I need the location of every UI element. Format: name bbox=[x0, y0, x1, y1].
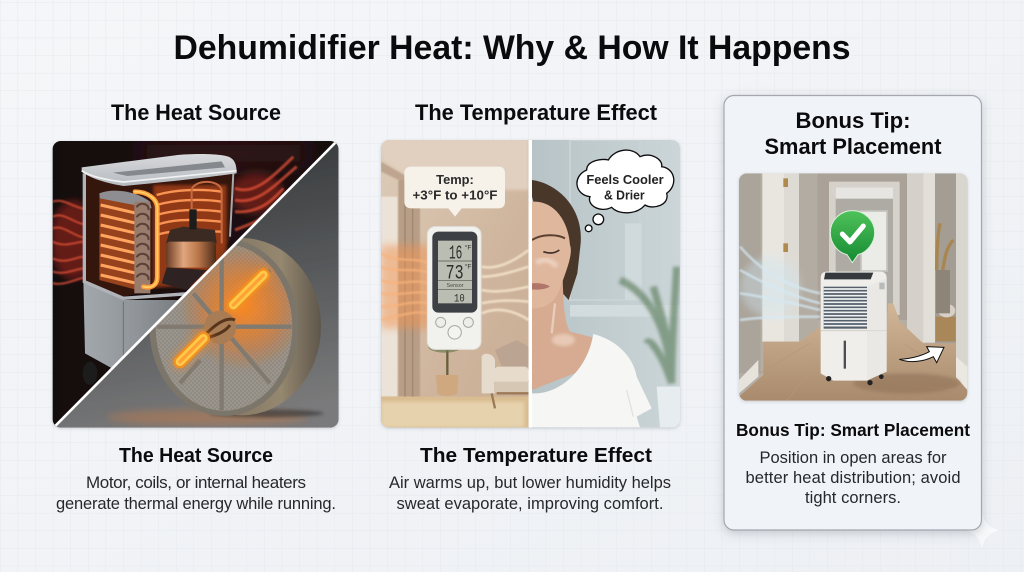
white shirt bbox=[532, 334, 652, 427]
heading: the heat source: The Heat Source bbox=[111, 100, 281, 125]
dehumidifier bbox=[821, 272, 887, 385]
caption heading: bonus tip: Bonus Tip: Smart Placement bbox=[736, 420, 970, 440]
caption text: the heat source bbox=[56, 473, 336, 513]
floor bbox=[739, 303, 967, 401]
panel: the temperature effect bbox=[377, 100, 682, 513]
basket and decor bbox=[936, 317, 956, 341]
left: warm room bbox=[377, 137, 530, 430]
heading: the temperature effect: The Temperature Effect bbox=[415, 100, 658, 125]
plant bbox=[620, 267, 677, 383]
interior bbox=[84, 173, 233, 297]
caption heading: the heat source: The Heat Source bbox=[119, 445, 273, 467]
caption text: bonus tip: tight corners. bbox=[805, 489, 901, 507]
icon: green check pin bbox=[830, 211, 875, 263]
motor bbox=[166, 227, 217, 243]
title: Dehumidifier Heat: Why & How It Happens bbox=[174, 29, 850, 67]
frame and lid bbox=[84, 173, 193, 298]
neck and body skin bbox=[532, 280, 593, 390]
thermostat device: 73 bbox=[446, 263, 464, 286]
plant and pot bbox=[446, 350, 448, 375]
caption text: bonus tip: better heat distribution; avoid bbox=[746, 469, 960, 487]
heading: bonus tip bbox=[764, 108, 942, 159]
icon: sparkle bbox=[964, 512, 1000, 548]
upper-left: dehumidifier cutaway bbox=[50, 138, 307, 385]
illustration: thermostat and woman bbox=[377, 137, 682, 430]
illustration: dehumidifier in hallway bbox=[739, 173, 967, 401]
caption text: the temperature effect: sweat evaporate, improving comfort. bbox=[396, 495, 664, 513]
thermostat device: °F bbox=[465, 262, 471, 270]
face bbox=[532, 202, 571, 308]
thermostat device bbox=[427, 227, 481, 349]
caption text: bonus tip bbox=[746, 449, 960, 507]
card background bbox=[724, 96, 982, 530]
heat waves left bbox=[52, 192, 83, 288]
illustration: dehumidifier cutaway and heater wheel bbox=[50, 138, 340, 428]
heat waves right bbox=[230, 173, 283, 213]
cool air waves bbox=[740, 257, 800, 317]
body lower bbox=[83, 283, 178, 368]
caption text: the heat source: Motor, coils, or internal heaters bbox=[86, 473, 306, 492]
sofa bbox=[482, 354, 495, 393]
thought bubble: Feels Cooler bbox=[586, 173, 664, 187]
lower-right: heater wheel scene bbox=[50, 138, 340, 428]
heading: bonus tip: Smart Placement bbox=[764, 134, 942, 159]
evaporator coil block bbox=[99, 193, 150, 293]
far hallway bbox=[818, 173, 907, 320]
callout: temperature bbox=[404, 167, 505, 217]
warm air waves bbox=[381, 245, 433, 328]
diagonal divider bbox=[55, 142, 336, 426]
panel: bonus tip bbox=[724, 96, 982, 530]
callout: temperature: Temp: bbox=[436, 173, 474, 187]
caption heading: the temperature effect: The Temperature Effect bbox=[420, 445, 652, 467]
right: woman bbox=[532, 137, 682, 430]
thermostat device: °F bbox=[465, 243, 471, 251]
caption text: the heat source: generate thermal energy while running. bbox=[56, 495, 336, 513]
heading: bonus tip: Bonus Tip: bbox=[796, 108, 910, 133]
thermostat device: 16 bbox=[449, 242, 462, 264]
caption text: bonus tip: Position in open areas for bbox=[760, 449, 947, 467]
left wall and door bbox=[739, 173, 761, 373]
caption text: the temperature effect bbox=[389, 474, 671, 513]
hair bbox=[532, 180, 581, 300]
thermostat device: 10 bbox=[454, 293, 465, 305]
thermostat device: Sensor bbox=[447, 283, 464, 289]
panel: the heat source bbox=[50, 100, 340, 513]
thought bubble bbox=[577, 150, 674, 232]
callout: temperature: +3°F to +10°F bbox=[412, 188, 498, 202]
thought bubble: & Drier bbox=[604, 188, 645, 202]
icon: arrow bbox=[899, 347, 944, 363]
caption text: the temperature effect: Air warms up, but lower humidity helps bbox=[389, 474, 671, 492]
right wall bbox=[907, 173, 924, 343]
